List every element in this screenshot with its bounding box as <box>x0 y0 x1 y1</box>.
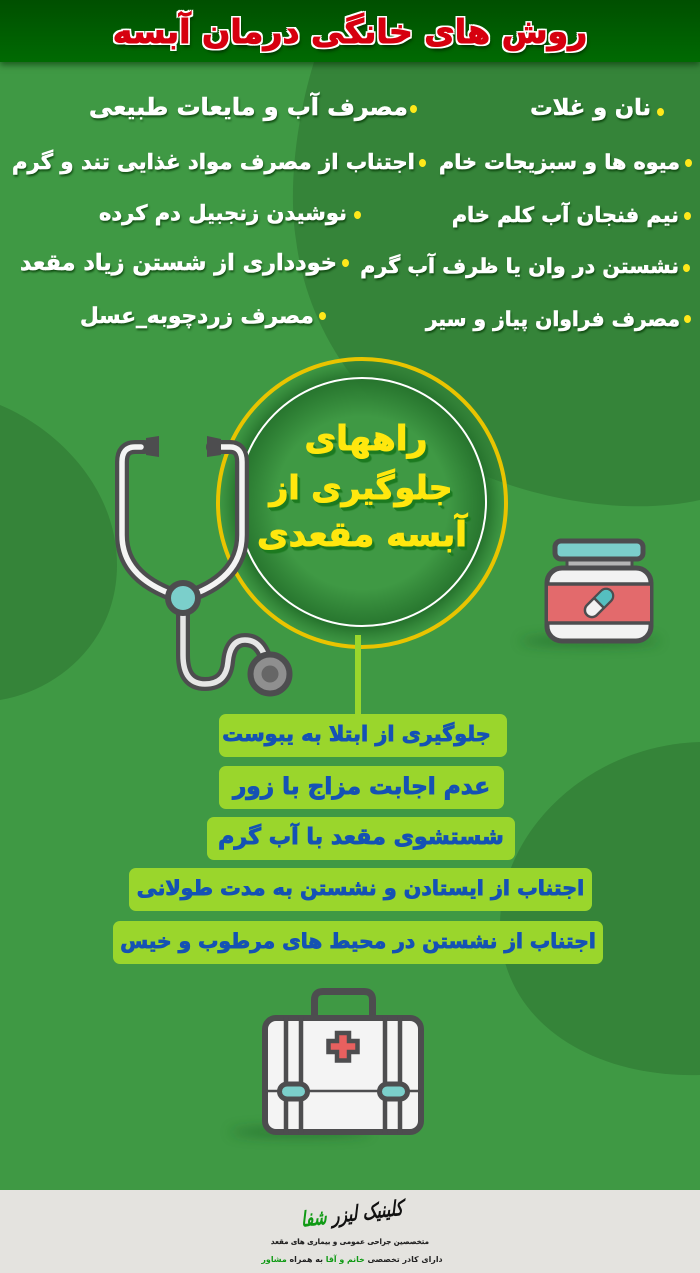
pill 3 <box>207 817 515 860</box>
bullet <box>657 108 664 116</box>
pill 2 <box>219 766 504 809</box>
list: right column <box>360 95 692 334</box>
footer line 2: دارای کادر تخصصی خانم و آقا به همراه مشاور <box>261 1255 443 1264</box>
item: نوشیدن زنجبیل دم کرده <box>99 201 347 225</box>
pill 5: اجتناب از نشستن در محیط های مرطوب و خیس <box>120 929 596 953</box>
pill 5 <box>113 921 603 964</box>
item: میوه ها و سبزیجات خام <box>439 150 680 174</box>
heading line 1: راههای <box>305 419 427 459</box>
bullet <box>354 211 361 219</box>
bullet <box>684 315 691 323</box>
item: نشستن در وان یا ظرف آب گرم <box>360 254 679 278</box>
bullet <box>419 159 426 167</box>
pill 1: جلوگیری از ابتلا به یبوست <box>222 722 491 746</box>
header banner <box>0 0 700 62</box>
icon: pill jar <box>526 538 654 650</box>
bullet <box>410 105 417 113</box>
pill 1 <box>219 714 507 757</box>
heading line 2: جلوگیری از <box>269 468 453 507</box>
clinic logo: کلینیک لیزر شفا <box>300 1196 404 1232</box>
item: مصرف آب و مایعات طبیعی <box>89 93 408 121</box>
item: خودداری از شستن زیاد مقعد <box>20 250 337 276</box>
item: نیم فنجان آب کلم خام <box>452 203 679 227</box>
pill 3: شستشوی مقعد با آب گرم <box>218 824 504 850</box>
prevention pills <box>113 714 603 964</box>
item: نان و غلات <box>530 95 651 121</box>
footer <box>0 1190 700 1273</box>
bullet <box>684 212 691 220</box>
heading line 3: آبسه مقعدی <box>257 515 467 555</box>
connector stem <box>355 635 361 715</box>
bullet <box>319 312 326 320</box>
footer line 1: متخصصین جراحی عمومی و بیماری های مقعد <box>271 1238 429 1246</box>
icon: stethoscope <box>115 436 292 696</box>
pill 4: اجتناب از ایستادن و نشستن به مدت طولانی <box>137 876 584 900</box>
central circle <box>216 357 508 649</box>
icon: first aid kit <box>236 988 424 1142</box>
item: مصرف زردچوبه_عسل <box>80 304 314 329</box>
item: اجتناب از مصرف مواد غذایی تند و گرم <box>12 149 415 174</box>
pill 2: عدم اجابت مزاج با زور <box>233 773 490 800</box>
circle heading <box>257 419 471 556</box>
pill 4 <box>129 868 592 911</box>
bullet <box>685 159 692 167</box>
title: روش های خانگی درمان آبسه <box>113 12 587 51</box>
list: left column <box>12 92 426 332</box>
bullet <box>342 259 349 267</box>
bullet <box>683 264 690 272</box>
item: مصرف فراوان پیاز و سیر <box>426 307 680 331</box>
